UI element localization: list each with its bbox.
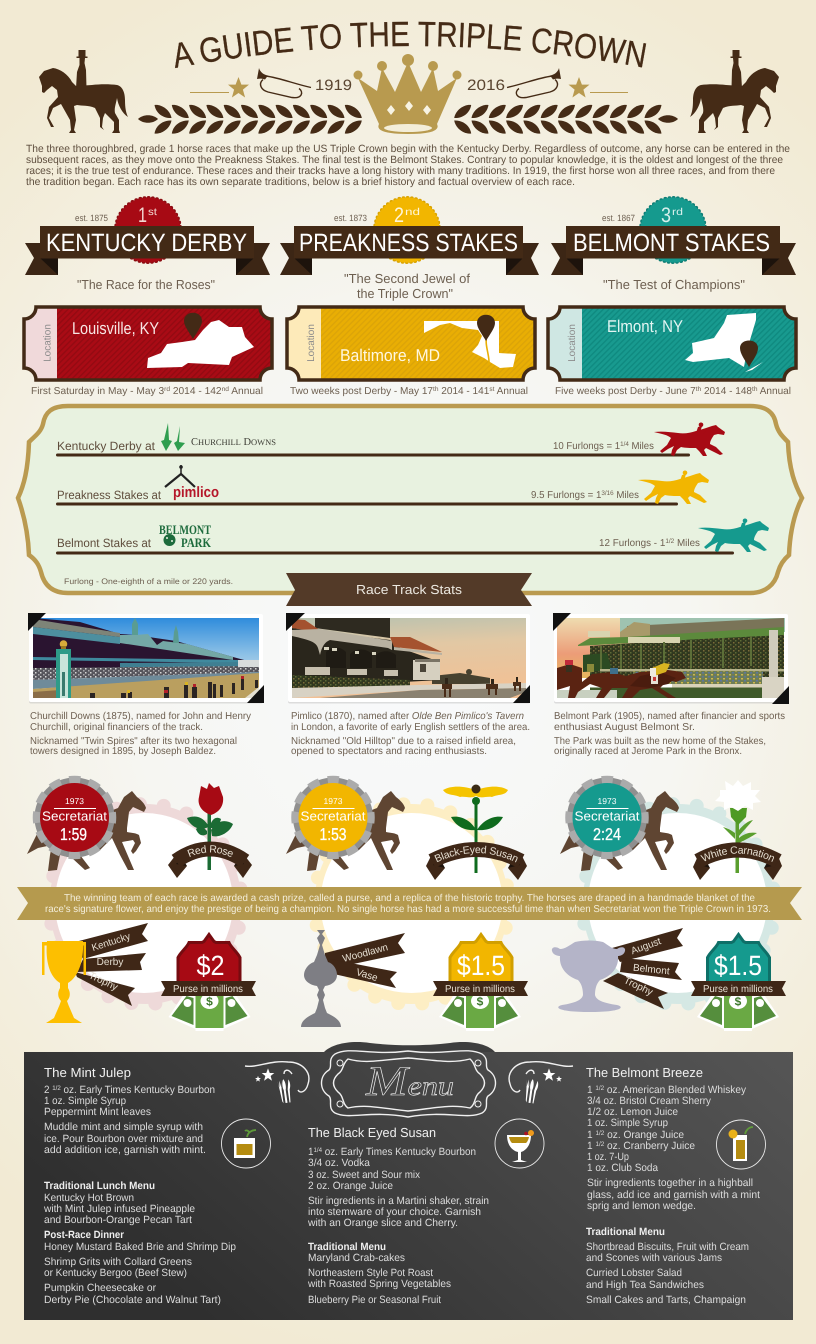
badge: 1st: 1	[138, 204, 147, 227]
menu column: The Mint Julep: Derby Pie (Chocolate and Walnut Tart)	[44, 1294, 221, 1306]
photo captions: opened to spectators and racing enthusiasts.	[291, 746, 487, 757]
track row: Preakness Stakes: 3/16	[601, 490, 614, 497]
ticket: Elmont location: Location	[567, 324, 578, 362]
trophy: Woodlawn Vase	[301, 930, 405, 1027]
track row: Kentucky Derby: 1/4	[620, 441, 629, 448]
icon: left laurel	[138, 105, 362, 134]
menu column: The Belmont Breeze: oz. Orange Juice	[604, 1129, 684, 1141]
winner badge: Belmont record: Secretariat	[574, 808, 640, 824]
photo captions: Belmont Park (1905), named after financier and sports	[554, 711, 785, 722]
menu column: The Mint Julep: Peppermint Mint leaves	[44, 1106, 151, 1118]
intro text	[26, 143, 790, 188]
icon: map pin	[477, 315, 495, 341]
menu column: The Mint Julep: 2	[44, 1084, 50, 1096]
menu column: The Belmont Breeze: 1/2	[595, 1085, 604, 1092]
race dates: Annual	[229, 386, 263, 397]
track row: Belmont Stakes: 1/2	[665, 538, 675, 545]
panel: race track stats	[18, 406, 802, 593]
menu column: The Belmont Breeze: 1	[587, 1084, 593, 1096]
panel: Belmont Stakes heading	[551, 198, 796, 292]
menu column: The Mint Julep: Shrimp Grits with Collard Greens	[44, 1256, 192, 1268]
ribbon: Preakness Stakes	[280, 226, 539, 275]
ticket: Louisville location	[24, 307, 272, 380]
ornament: left stars and cutlery	[245, 1062, 309, 1104]
menu column: The Mint Julep	[43, 1065, 236, 1306]
panel: Preakness Stakes heading: "The Second Jewel of	[344, 271, 470, 286]
track row: Preakness Stakes: Preakness Stakes at	[57, 488, 162, 502]
badge: 1st: st	[148, 207, 157, 218]
race dates	[31, 386, 791, 397]
flower: red rose	[168, 783, 252, 878]
track row: Kentucky Derby	[56, 422, 725, 456]
photo captions	[30, 711, 785, 757]
icon: mint julep glass	[222, 1119, 270, 1168]
ribbon: Belmont Stakes	[551, 226, 796, 275]
icon: map pin	[740, 340, 758, 367]
menu column: The Belmont Breeze: and High Tea Sandwiches	[586, 1279, 704, 1291]
header ornament: right star, trumpet and year: 2016	[467, 77, 505, 94]
track row: Belmont Stakes: Miles	[674, 538, 700, 549]
menu column: The Belmont Breeze: 1 oz. 7-Up	[587, 1151, 629, 1163]
logo: Pimlico: pimlico	[173, 484, 219, 501]
ticket: Baltimore location	[287, 307, 535, 380]
purse: $2	[161, 934, 256, 1031]
photo captions: The Park was built as the new home of the Stakes,	[554, 736, 766, 747]
menu column: The Belmont Breeze: Traditional Menu	[586, 1226, 665, 1238]
photo captions: Nicknamed "Old Hilltop" due to a raised infield area,	[291, 736, 516, 747]
logo: Pimlico	[165, 465, 219, 501]
intro text: The three thoroughbred, grade 1 horse races that make up the US Triple Crown begin with the Kentucky Derby. Regardless of outcome, any horse can be entered in the	[26, 143, 790, 155]
menu column: The Mint Julep: with Mint Julep infused Pineapple	[43, 1203, 195, 1215]
trophy: Kentucky Derby Trophy: Trophy	[87, 970, 119, 993]
menu column: The Belmont Breeze: glass, add ice and garnish with a mint	[587, 1189, 760, 1201]
menu column: The Belmont Breeze: Curried Lobster Salad	[586, 1267, 682, 1279]
track row: Belmont Stakes: 12 Furlongs - 1	[599, 538, 666, 549]
footnote: Furlong - One-eighth of a mile or 220 yards.	[64, 577, 233, 586]
logo: Belmont Park: PARK	[181, 535, 212, 550]
header ornament: left star, trumpet and year	[190, 68, 352, 98]
track row: Kentucky Derby: 10 Furlongs = 1	[553, 441, 623, 452]
trophy: Kentucky Derby Trophy: Kentucky	[91, 931, 132, 954]
purse: $1.5 Belmont	[691, 934, 786, 1031]
ribbon: Kentucky Derby	[25, 226, 270, 275]
winner badge: Belmont record	[560, 780, 679, 871]
menu column: The Black Eyed Susan: Stir ingredients in a Martini shaker, strain	[308, 1195, 489, 1207]
badge: 1st	[116, 198, 180, 262]
map: New York	[685, 313, 763, 372]
menu column: The Belmont Breeze: oz. American Blended Whiskey	[604, 1084, 747, 1096]
menu column: The Belmont Breeze: 1/2	[595, 1141, 605, 1148]
banner: purse and trophy explanation: The winning team of each race is awarded a cash prize, called a purse, and a replica of the historic trophy. The horses are draped in a handmade blanket of the	[64, 893, 755, 904]
ribbon: White Carnation: White Carnation	[700, 846, 774, 862]
menu column: The Black Eyed Susan: 2 oz. Orange Juice	[308, 1180, 393, 1192]
icon: left rider on horse	[39, 50, 128, 133]
menu column: The Black Eyed Susan: 1	[308, 1146, 314, 1158]
badge: 2nd: nd	[405, 207, 420, 218]
trophy: August Belmont Trophy: Belmont	[632, 963, 670, 977]
intro text: subsequent races, as they move onto the Preakness Stakes. The final test is the Belmont Stakes. Contrary to popular knowledge, it is the oldest and longest of the three	[26, 154, 783, 166]
photo: Pimlico	[286, 613, 530, 704]
menu column: The Black Eyed Susan: into stemware of your choice. Garnish	[308, 1206, 481, 1218]
race dates: th	[433, 386, 439, 393]
logo: Churchill Downs: CHURCHILL DOWNS	[191, 437, 276, 448]
race dates: 2014 - 141	[438, 386, 490, 397]
menu column: The Black Eyed Susan: The Black Eyed Susan	[308, 1125, 436, 1140]
menu column: The Mint Julep: and Bourbon-Orange Pecan Tart	[44, 1214, 192, 1226]
scalloped background ovals	[50, 804, 774, 1004]
title: A GUIDE TO THE TRIPLE CROWN	[174, 22, 646, 68]
map: Maryland	[424, 321, 516, 368]
flower: white carnation	[693, 780, 782, 880]
trophy: Woodlawn Vase: Vase	[355, 967, 379, 984]
panel: Preakness Stakes heading	[280, 198, 539, 301]
icon: right rider on horse	[690, 50, 779, 133]
photo captions: originally raced at Jerome Park in the Bronx.	[554, 746, 742, 757]
race dates: Annual	[757, 386, 791, 397]
photo captions: Churchill Downs (1875), named for John and Henry	[30, 711, 251, 722]
panel: menu chalkboard	[24, 1042, 793, 1320]
ticket: Baltimore location: Baltimore, MD	[340, 346, 440, 365]
ribbon: Kentucky Derby: KENTUCKY DERBY	[46, 229, 247, 257]
ribbon: Black-Eyed Susan: Black-Eyed Susan	[434, 846, 518, 862]
race dates: 2014 - 148	[701, 386, 752, 397]
menu column: The Black Eyed Susan: 3/4 oz. Vodka	[308, 1157, 370, 1169]
menu column: The Belmont Breeze: Stir ingredients together in a highball	[587, 1177, 753, 1189]
ticket: Elmont location: Elmont, NY	[607, 317, 683, 336]
menu column: The Belmont Breeze: and Scones with various Jams	[586, 1252, 722, 1264]
winner badge: Derby record	[27, 780, 146, 871]
menu column: The Mint Julep: add addition ice, garnish with mint.	[44, 1144, 206, 1156]
race dates: st	[489, 386, 495, 393]
menu column: The Belmont Breeze: Shortbread Biscuits, Fruit with Cream	[586, 1241, 749, 1253]
winner badge: Preakness record: 1:53	[320, 825, 346, 844]
race dates: 2014 - 142	[170, 386, 222, 397]
menu column: The Belmont Breeze: The Belmont Breeze	[586, 1065, 703, 1080]
menu column: The Black Eyed Susan	[307, 1125, 489, 1306]
icon: highball glass	[716, 1120, 766, 1169]
menu column: The Black Eyed Susan: 1/4	[314, 1147, 322, 1154]
banner: Race Track Stats	[286, 573, 532, 606]
trophy: Kentucky Derby Trophy: Derby	[97, 957, 123, 968]
badge: 3rd: 3	[661, 204, 671, 227]
menu column: The Black Eyed Susan: Northeastern Style Pot Roast	[308, 1267, 433, 1279]
badge: 2nd	[374, 198, 440, 262]
race dates: Annual	[494, 386, 528, 397]
menu column: The Mint Julep: 1/2	[52, 1085, 61, 1092]
track row: Belmont Stakes: Belmont Stakes at	[57, 536, 152, 550]
header ornament: left star, trumpet and year: 1919	[315, 77, 352, 94]
winner badge: Derby record: 1973	[65, 796, 84, 806]
ticket: Elmont location	[548, 307, 796, 380]
menu column: The Belmont Breeze: 1 oz. Simple Syrup	[587, 1117, 668, 1129]
icon: right laurel	[454, 105, 678, 134]
menu column: The Mint Julep: Honey Mustard Baked Brie and Shrimp Dip	[44, 1241, 236, 1253]
panel: Belmont Stakes heading: est. 1867	[602, 213, 635, 223]
menu column: The Mint Julep: oz. Early Times Kentucky Bourbon	[61, 1084, 215, 1096]
menu column: The Belmont Breeze: Small Cakes and Tarts, Champaign	[586, 1294, 746, 1306]
ribbon: Preakness Stakes: PREAKNESS STAKES	[299, 229, 518, 257]
badge: 2nd: 2	[394, 204, 404, 227]
menu column: The Mint Julep: ice. Pour Bourbon over mixture and	[44, 1133, 203, 1145]
race dates: rd	[164, 386, 170, 393]
menu column: The Black Eyed Susan: Maryland Crab-cakes	[308, 1252, 405, 1264]
photo captions: in London, a favorite of early English settlers of the area.	[291, 722, 530, 733]
menu column: The Black Eyed Susan: 3 oz. Sweet and Sour mix	[308, 1169, 421, 1181]
menu plaque	[322, 1051, 496, 1117]
logo: Belmont Park: BELMONT	[159, 522, 211, 537]
menu column: The Black Eyed Susan: Traditional Menu	[308, 1241, 386, 1253]
winner badge: Preakness record	[286, 780, 405, 871]
menu column: The Mint Julep: or Kentucky Bergoo (Beef Stew)	[44, 1267, 187, 1279]
photo captions: Pimlico (1870), named after Olde Ben Pimlico's Tavern	[291, 711, 524, 722]
trophy: August Belmont Trophy: August	[630, 936, 663, 957]
winner badge: Belmont record: 2:24	[593, 825, 621, 844]
winner badge: Derby record: Secretariat	[42, 808, 107, 824]
menu column: The Mint Julep: Pumpkin Cheesecake or	[44, 1282, 156, 1294]
photo captions: Churchill, original financiers of the track.	[30, 722, 203, 733]
race dates: nd	[222, 386, 229, 393]
banner: purse and trophy explanation	[17, 887, 802, 920]
ticket: Louisville location: Location	[42, 324, 54, 362]
ribbon flags	[75, 923, 148, 1006]
icon: martini glass	[495, 1119, 544, 1168]
trophy: August Belmont Trophy: Trophy	[622, 975, 654, 998]
purse: $1.5 Preakness: $1.5	[457, 950, 505, 981]
panel: Kentucky Derby heading: est. 1875	[75, 213, 108, 223]
winner badge: Preakness record: Secretariat	[300, 808, 366, 824]
intro text: the tradition began. Each race has its own separate traditions, below is a brief history and factual overview of each race.	[26, 176, 575, 188]
icon: map pin	[184, 313, 202, 339]
purse: $1.5 Preakness	[433, 934, 528, 1031]
menu column: The Belmont Breeze: sprig and lemon wedge.	[587, 1200, 696, 1212]
purse: $2: Purse in millions	[173, 984, 243, 995]
menu column: The Black Eyed Susan: Blueberry Pie or Seasonal Fruit	[308, 1294, 441, 1306]
icon: crown	[354, 54, 462, 134]
menu column: The Belmont Breeze: 1/2	[595, 1130, 605, 1137]
menu column: The Black Eyed Susan: with an Orange slice and Cherry.	[307, 1217, 458, 1229]
ornament: right stars and cutlery	[509, 1062, 573, 1104]
photo: Belmont Park	[553, 613, 789, 704]
menu column: The Belmont Breeze	[586, 1065, 760, 1306]
photo captions: towers designed in 1895, by Joseph Baldez.	[30, 746, 216, 757]
logo: Belmont Park	[159, 522, 212, 550]
trophy: August Belmont Trophy	[552, 928, 683, 1012]
menu column: The Belmont Breeze: 1	[587, 1140, 593, 1152]
ticket: Baltimore location: Location	[306, 324, 317, 362]
purse: $1.5 Belmont: Purse in millions	[703, 984, 773, 995]
menu column: The Belmont Breeze: oz. Cranberry Juice	[604, 1140, 695, 1152]
menu column: The Belmont Breeze: 1/2 oz. Lemon Juice	[587, 1106, 678, 1118]
track row: Belmont Stakes	[56, 518, 769, 554]
menu column: The Belmont Breeze: 1	[587, 1129, 593, 1141]
race dates: Two weeks post Derby - May 17	[290, 386, 432, 397]
menu column: The Mint Julep: Kentucky Hot Brown	[44, 1192, 134, 1204]
header ornament: right star, trumpet and year	[467, 68, 628, 98]
race dates: th	[752, 386, 758, 393]
winner badge: Belmont record: 1973	[598, 796, 617, 806]
trophy: Woodlawn Vase: Woodlawn	[341, 942, 389, 965]
icon: red racehorse	[654, 422, 725, 456]
photo: Churchill Downs	[28, 613, 264, 704]
panel: Kentucky Derby heading: "The Race for the Roses"	[77, 277, 215, 292]
badge: 3rd	[640, 198, 706, 262]
menu plaque: Menu	[365, 1059, 454, 1105]
photo captions: enthusiast August Belmont Sr.	[554, 722, 695, 733]
ribbon: Belmont Stakes: BELMONT STAKES	[573, 229, 770, 257]
menu column: The Mint Julep: Traditional Lunch Menu	[44, 1180, 155, 1192]
banner: Race Track Stats: Race Track Stats	[356, 582, 463, 597]
photo captions: Nicknamed "Twin Spires" after its two hexagonal	[30, 736, 237, 747]
race dates: Five weeks post Derby - June 7	[555, 386, 695, 397]
flower: black-eyed susan	[426, 784, 527, 880]
winner badge: Derby record: 1:59	[60, 825, 87, 844]
menu column: The Black Eyed Susan: oz. Early Times Kentucky Bourbon	[322, 1146, 476, 1158]
menu column: The Belmont Breeze: 1 oz. Club Soda	[587, 1162, 658, 1174]
menu column: The Belmont Breeze: 3/4 oz. Bristol Cream Sherry	[587, 1095, 712, 1107]
menu column: The Mint Julep: 1 oz. Simple Syrup	[44, 1095, 126, 1107]
ribbon: Red Rose: Red Rose	[187, 845, 233, 857]
menu column: The Black Eyed Susan: with Roasted Spring Vegetables	[307, 1278, 451, 1290]
purse: $1.5 Belmont: $1.5	[714, 950, 762, 981]
menu column: The Mint Julep: Muddle mint and simple syrup with	[44, 1121, 203, 1133]
trophy: Kentucky Derby Trophy	[42, 923, 148, 1023]
logo: Churchill Downs	[161, 423, 276, 451]
track row: Preakness Stakes: 9.5 Furlongs = 1	[531, 490, 604, 501]
track row: Kentucky Derby: Kentucky Derby at	[57, 439, 156, 453]
panel: Preakness Stakes heading: est. 1873	[334, 213, 367, 223]
icon: teal racehorse	[698, 518, 769, 552]
race dates: th	[696, 386, 702, 393]
banner: purse and trophy explanation: race's signature flower, and enjoy the prestige of being a champion. No single horse has had a more successful time than when Secretariat won the Triple Crown in 1973.	[45, 904, 771, 915]
icon: yellow racehorse	[638, 470, 709, 504]
track row: Preakness Stakes	[56, 465, 709, 506]
menu column: The Mint Julep: The Mint Julep	[44, 1065, 131, 1080]
panel: Kentucky Derby heading	[25, 198, 270, 292]
purse: $2: $2	[196, 950, 224, 981]
track row: Kentucky Derby: Miles	[629, 441, 654, 452]
panel: Belmont Stakes heading: "The Test of Champions"	[603, 277, 745, 292]
panel: Preakness Stakes heading: the Triple Crown"	[357, 286, 453, 301]
menu column: The Mint Julep: Post-Race Dinner	[44, 1229, 124, 1241]
map: Kentucky	[147, 320, 254, 368]
badge: 3rd: rd	[672, 207, 683, 218]
purse: $1.5 Preakness: Purse in millions	[445, 984, 515, 995]
intro text: races; it is the true test of endurance. These races and their tracks have a long history with many traditions. In 1919, the first horse won all three races, and from there	[26, 165, 775, 177]
ticket: Louisville location: Louisville, KY	[72, 319, 159, 338]
winner badge: Preakness record: 1973	[324, 796, 343, 806]
track row: Preakness Stakes: Miles	[614, 490, 639, 501]
race dates: First Saturday in May - May 3	[31, 386, 162, 397]
